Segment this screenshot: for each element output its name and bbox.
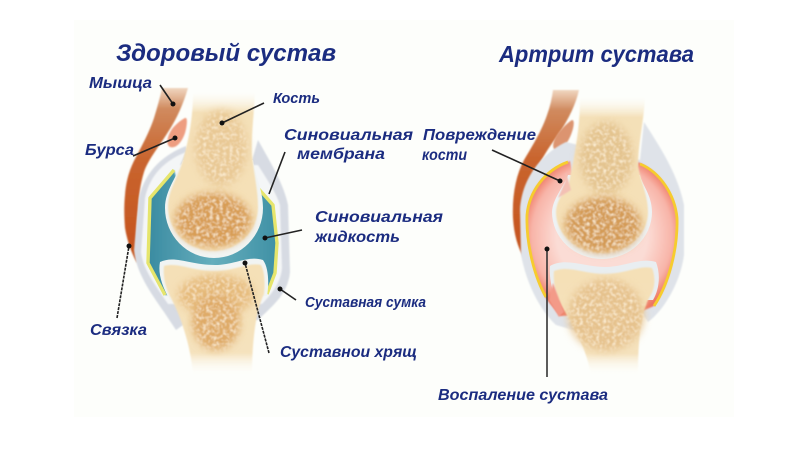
muscle [513, 90, 579, 258]
label: synovial fluid: жидкость [314, 229, 400, 246]
title: arthritic joint: Артрит сустава [498, 41, 694, 67]
membrane [527, 162, 677, 306]
spongy bone, lower [178, 275, 254, 315]
label: bone [220, 91, 320, 126]
inflammation at lower edge [549, 283, 564, 317]
background panel [74, 20, 734, 417]
spongy bone, lower [568, 279, 644, 351]
label: muscle: Мышца [89, 75, 152, 92]
label: ligament: Связка [90, 322, 147, 339]
muscle and ligament [124, 88, 188, 263]
label: muscle [89, 75, 176, 106]
spongy bone, upper shaft [195, 110, 247, 186]
label: bursa [85, 136, 178, 159]
upper bone [552, 175, 652, 259]
joint capsule [134, 140, 290, 330]
synovial cavity [148, 170, 277, 295]
label: joint capsule: Суставная сумка [305, 295, 426, 311]
spongy bone, upper shaft [579, 122, 633, 194]
inflamed synovium [527, 161, 677, 316]
bursa [553, 120, 574, 150]
capsule [520, 122, 684, 335]
label: synovial membrane [269, 127, 413, 194]
label: articular cartilage [242, 260, 417, 361]
label: bursa: Бурса [85, 142, 134, 159]
diagram: arthritic joint [513, 90, 684, 375]
lower bone [550, 261, 659, 300]
label: joint inflammation: Воспаление сустава [438, 387, 608, 404]
label: joint inflammation [438, 246, 608, 404]
bone damage [558, 172, 571, 198]
upper bone [165, 160, 263, 258]
label: joint capsule [278, 286, 426, 311]
bursa [167, 118, 187, 147]
spongy bone, upper head [175, 193, 251, 247]
lower bone [159, 259, 268, 300]
synovial membrane [148, 170, 277, 295]
label: bone damage: Повреждение [423, 127, 536, 144]
label: synovial fluid [262, 209, 443, 246]
label: synovial fluid: Синовиальная [315, 209, 443, 226]
spongy bone, upper head [565, 197, 641, 253]
label: synovial membrane: Синовиальная [284, 127, 413, 144]
diagram: healthy joint [124, 88, 290, 375]
label: bone damage: кости [422, 147, 467, 164]
label: synovial membrane: мембрана [297, 146, 385, 163]
label: bone damage [422, 127, 562, 184]
title: healthy joint: Здоровый сустав [116, 40, 336, 67]
label: articular cartilage: Суставнои хрящ [280, 344, 417, 361]
label: ligament [90, 244, 147, 339]
label: bone: Кость [273, 91, 320, 107]
